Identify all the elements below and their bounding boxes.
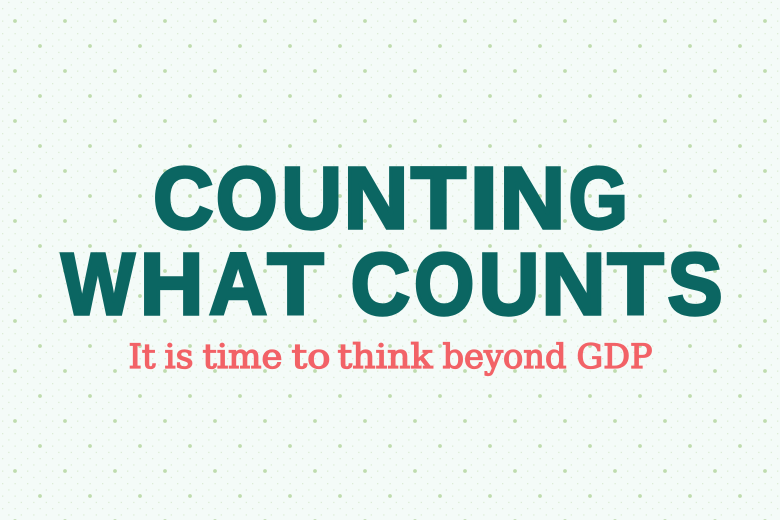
title line 2: T (268, 235, 324, 332)
title line 2: U (479, 236, 539, 333)
title line 2 (61, 235, 722, 333)
title line 2: W (61, 236, 135, 333)
title line 1: O (216, 149, 278, 247)
title line 2: O (414, 237, 474, 333)
title line 2: S (668, 235, 722, 332)
title line 2: T (608, 235, 664, 332)
title line 1: U (281, 150, 342, 247)
subtitle: It (128, 337, 156, 377)
title line 1: C (153, 150, 213, 247)
title (61, 149, 722, 333)
subtitle: to (292, 337, 330, 377)
title line 1: T (411, 149, 466, 246)
title line 2: N (542, 235, 606, 333)
title line 1: N (344, 149, 408, 247)
subtitle: beyond (442, 337, 566, 377)
title line 1: N (500, 149, 565, 246)
title line 2: H (140, 235, 203, 333)
subtitle: is (164, 337, 194, 377)
title line 1: I (470, 150, 498, 247)
title line 2: C (351, 235, 410, 332)
subtitle: GDP (576, 337, 652, 377)
subtitle: time (202, 337, 282, 377)
subtitle: think (338, 337, 433, 377)
title line 2: A (209, 235, 267, 333)
title line 1: G (569, 150, 628, 247)
title line 1 (153, 149, 628, 247)
subtitle (128, 337, 652, 377)
